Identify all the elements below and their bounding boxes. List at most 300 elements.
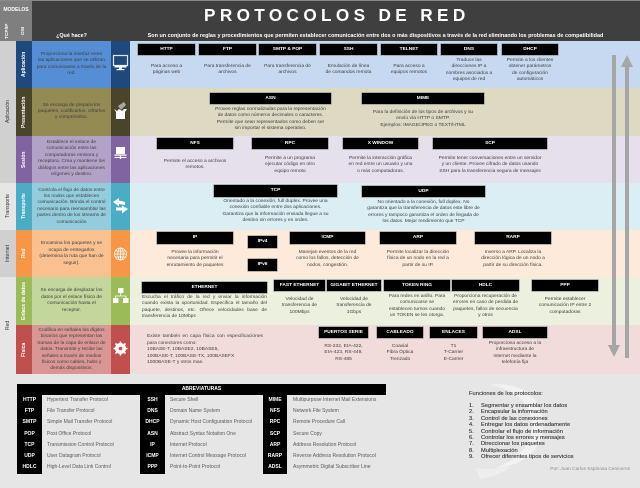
protocol: Cableado: CABLEADO — [386, 330, 414, 335]
panel: capa de aplicacion: las aplicaciones que se utilizan — [38, 58, 105, 63]
panel: capa de presentacion: y comprimirlos. — [55, 115, 88, 120]
abbreviation column 1: FTP — [25, 408, 34, 414]
abbreviation column 2: DNS — [147, 408, 158, 414]
panel: capa de sesion: Establece el enlace de — [47, 140, 96, 145]
abbreviation column 2: SSH — [147, 397, 158, 403]
list items: Controlar los errores y mensajes — [481, 435, 565, 441]
text: conectores fisicos: 1000BASE-T y otros mas. — [147, 360, 203, 365]
protocol: X Window: en red entre un usuario y una — [349, 162, 412, 167]
protocol: Token Ring: comunicarse se — [400, 300, 434, 305]
protocol: IP: IP — [193, 235, 197, 240]
protocol: UDP — [361, 185, 486, 224]
abbreviation column 2: IP — [150, 442, 155, 448]
protocol: X Window: o más computadoras. — [357, 168, 404, 174]
arrow: up — [621, 55, 633, 358]
protocol: SSH: SSH — [344, 47, 353, 52]
TCP/IP column: Internet — [0, 230, 16, 277]
protocol: Fast Ethernet: Velocidad de — [285, 297, 314, 302]
protocol: DHCP: DHCP — [523, 47, 537, 52]
meanings column 1: Transmission Control Protocol — [47, 442, 114, 448]
protocol: SMTP y POP: SMTP & POP — [273, 47, 302, 52]
protocol: Puertos serie: RS-232, EIA-422, — [324, 344, 363, 349]
meanings column 3 — [293, 395, 385, 474]
protocol: PPP: computadoras — [550, 310, 580, 315]
label: TCP/IP: TCP/IP — [5, 23, 10, 39]
abbreviation column 2 — [140, 395, 165, 474]
protocol: Gigabit Ethernet: Velocidad de — [340, 297, 368, 302]
protocol: IP: necesaria para permitir el — [167, 256, 223, 261]
list numbers: 9. — [469, 454, 474, 460]
protocol: DNS — [440, 43, 498, 82]
meanings column 3: Asymmetric Digital Subscriber Line — [293, 464, 371, 470]
text: conectores fisicos: Existe también en capa física con especificaciones — [147, 334, 263, 339]
protocol: SMTP y POP: Para transferencia de — [264, 64, 311, 69]
abbreviation column 1: UDP — [24, 453, 35, 459]
panel: capa fisica: binarios que representan las — [41, 334, 102, 339]
protocol: DHCP: de configuración — [512, 71, 548, 76]
protocol: DNS: DNS — [464, 47, 474, 52]
panel: capa de sesion: computadoras emisora y — [45, 153, 98, 158]
protocol: MIME: Para la definición de los tipos de archivos y su — [373, 110, 473, 115]
list numbers: 1. — [469, 403, 474, 409]
protocol: HDLC: errores en caso de perdida de — [453, 300, 518, 305]
text: conectores fisicos: 10BASE-T, 10BASE2, 10BASE5, — [147, 347, 219, 352]
protocol: MIME: MIME — [417, 96, 429, 101]
list numbers: 2. — [469, 409, 474, 415]
protocol: Enlaces — [429, 326, 478, 362]
panel: capa de aplicacion: para comunicarse a través de la — [37, 65, 106, 70]
subtitle: Son un conjunto de reglas y procedimientos que permiten establecer comunicación entre dos o más dispositivos a través de la red eliminando los problemas de compatibilidad — [148, 33, 603, 39]
list items: Controlar el flujo de información — [481, 429, 563, 435]
meanings column 2 — [170, 395, 262, 474]
abbreviation column 2: ASN — [147, 431, 158, 437]
protocol: SCP — [432, 137, 548, 174]
TCP/IP column: Aplicacion — [0, 41, 16, 183]
panel: capa de transporte — [16, 183, 640, 230]
tag: IPv6 — [248, 259, 277, 271]
protocol: Enlaces: T-Carrier — [444, 350, 463, 355]
protocol: ASN: sin importar el sistema operativo. — [235, 126, 306, 131]
protocol: DNS: direcciones IP a — [452, 64, 486, 69]
protocol: RARP: partir de su dirección física. — [483, 262, 543, 268]
icon: monitor — [111, 41, 130, 88]
table heading — [17, 384, 386, 395]
protocol: RPC: RPC — [285, 141, 295, 146]
panel: capa de enlace de datos: Enlace de datos — [21, 282, 27, 320]
meanings column 2: Abstract Syntax Notation One — [170, 431, 236, 437]
protocol: ASN: Provee reglas normalizadas para la representación — [215, 107, 326, 112]
meanings column 1: Simple Mail Transfer Protocol — [47, 419, 112, 425]
protocol: TELNET — [380, 43, 438, 75]
protocol: HDLC — [451, 279, 520, 318]
list items: Segmentar y ensamblar los datos — [481, 403, 567, 409]
protocol: ASN: de datos como números decimales o caracteres. — [218, 113, 323, 118]
panel: capa fisica: Física — [21, 342, 27, 357]
abbreviation column 1: HDLC — [23, 464, 36, 470]
panel: capa de enlace de datos: datos por el enlace físico de — [41, 295, 102, 300]
panel: capa de transporte: necesario para reensamblar las — [37, 207, 106, 212]
protocol: Fast Ethernet — [273, 279, 326, 315]
protocol: UDP: garantiza que la transferencia de datos este libre de — [367, 206, 480, 211]
protocol: ASN: ASN — [265, 96, 276, 101]
protocol: RPC: ejecutar código en otro — [265, 162, 315, 167]
protocol: ICMP — [289, 231, 366, 268]
protocol: Gigabit Ethernet: GIGABIT ETHERNET — [330, 283, 378, 288]
abbreviation column 2: PPP — [147, 464, 158, 470]
protocol: FTP: FTP — [223, 47, 232, 52]
protocol: DHCP: automáticos — [517, 77, 543, 82]
panel: capa fisica: físicos como cables, hubs y — [42, 360, 101, 365]
protocol: ADSL — [482, 326, 548, 365]
meanings column 1: High-Level Data Link Control — [47, 464, 111, 470]
protocol: IP — [156, 231, 234, 268]
icon: terminal — [111, 136, 130, 183]
list items: Ofrecer diferentes tipos de servicios — [481, 454, 574, 460]
protocol: X Window: Permite la interacción gráfica — [349, 156, 412, 160]
protocol: PPP: PPP — [560, 283, 570, 288]
abbreviation column 3: ARP — [270, 442, 280, 448]
protocol: Gigabit Ethernet: 1Gbps — [347, 310, 361, 315]
meanings column 3: Multipurpose Internet Mail Extensions — [293, 397, 376, 403]
panel: capa de enlace de datos: receptor. — [62, 308, 81, 313]
abbreviation column 1: SMTP — [23, 419, 36, 425]
functions heading: Funciones de los protocolos: — [469, 391, 543, 397]
protocol: ARP: ARP — [413, 235, 423, 240]
protocol: HTTP: páginas web — [153, 70, 180, 75]
table heading: ABREVIATURAS — [182, 386, 221, 392]
protocol: UDP: errores y tampoco garantiza el orden de llegada de — [368, 213, 479, 218]
protocol: HDLC: paquetes, fallos de secuencia — [453, 307, 518, 312]
protocol: Token Ring: un TOKEN se les otorga. — [390, 313, 444, 318]
protocol: SSH: Emulación de línea — [328, 64, 369, 69]
protocol: HDLC: HDLC — [479, 283, 492, 288]
column heading: que hace: ¿Qué hace? — [56, 33, 87, 39]
protocol: ADSL: Proporciona acceso a la — [489, 341, 541, 346]
TCP/IP column: Red: Red — [5, 321, 11, 330]
protocol: Ethernet: Escucha el tráfico de la red y enviar la información cuando exista la oportunidad. Especifica el tamaño del paquete, destinos, etc. Ofrece velocidades base de transferencia de 10Mbps — [142, 295, 267, 319]
panel: capa de aplicacion: red. — [67, 71, 76, 76]
panel: capa de transporte: comunicación — [57, 220, 86, 225]
protocol: RPC — [251, 137, 329, 174]
protocol: TCP: Garantiza que la información enviada llegue a su — [222, 212, 329, 217]
protocol: SCP: SSH para la transferencia segura de mensajes — [439, 168, 541, 174]
abbreviation column 3: NFS — [270, 408, 280, 414]
protocol: DNS: Traduce las — [456, 58, 482, 63]
protocol: ARP: física de un nodo en la red a — [387, 256, 449, 261]
panel: capa de aplicacion — [16, 41, 640, 88]
TCP/IP column: Aplicacion: Aplicación — [5, 101, 11, 123]
header band — [0, 0, 640, 41]
abbreviation column 1: TCP — [24, 442, 34, 448]
panel: capa de sesion: Sesión — [21, 151, 27, 168]
protocol: ASN — [209, 92, 332, 131]
protocol: ADSL: ADSL — [508, 330, 522, 335]
abbreviation column 1: HTTP — [23, 397, 36, 403]
panel: capa fisica: demás dispositivos. — [50, 366, 93, 371]
protocol: SMTP y POP: archivos — [278, 70, 297, 75]
meanings column 3: Reverse Address Resolution Protocol — [293, 453, 376, 459]
list items: Multiplexación — [481, 448, 518, 454]
protocol: PPP: Permite establecer — [545, 297, 585, 302]
panel: capa de presentacion — [16, 88, 640, 136]
protocol: ADSL: internet mediante la — [494, 354, 536, 359]
protocol: ARP — [379, 231, 457, 268]
panel: capa de presentacion: Presentación — [21, 96, 27, 128]
protocol: ICMP: Manejan eventos de la red — [299, 250, 356, 254]
protocol: HDLC: y otros — [478, 313, 493, 318]
protocol: RARP: dirección lógica de un nodo a — [481, 256, 545, 261]
list numbers: 5. — [469, 429, 474, 435]
meanings column 2: Internet Protocol — [170, 442, 207, 448]
protocol: FTP: archivos — [218, 70, 237, 75]
panel: capa de enlace de datos — [16, 277, 640, 325]
protocol: HDLC: Proporciona recuperación de — [454, 294, 517, 299]
list numbers: 8. — [469, 448, 474, 454]
meanings column 2: Internet Control Message Protocol — [170, 453, 246, 459]
protocol: SCP: SCP — [485, 141, 495, 146]
meanings column 2: Domain Name System — [170, 408, 220, 414]
meanings column 3: Remote Procedure Call — [293, 419, 345, 425]
meanings column 1: File Transfer Protocol — [47, 408, 95, 414]
protocol: SSH — [319, 43, 378, 75]
protocol: TCP: TCP — [271, 188, 280, 193]
meanings column 1: User Datagram Protocol — [47, 453, 101, 459]
panel: capa de sesion: comunicación entre las — [46, 146, 97, 151]
protocol: FTP — [198, 43, 257, 75]
protocol: Puertos serie: EIA-423, RS-449, — [324, 350, 363, 355]
tag: IPv4: IPv4 — [258, 239, 267, 244]
panel: capa de enlace de datos: comunicación hasta el — [47, 301, 96, 306]
protocol: UDP: No orientado a la conexión, full duplex. No — [378, 200, 469, 205]
panel: capa de sesion: orígenes y destino. — [51, 172, 92, 177]
meanings column 3: Address Resolution Protocol — [293, 442, 356, 448]
tag: IPv4 — [248, 236, 277, 248]
panel: capa de aplicacion: Aplicación — [21, 52, 27, 77]
abbreviation column 3: ADSL — [268, 464, 282, 470]
abbreviation column 2: DHCP — [145, 419, 160, 425]
protocol: ICMP: nodos, congestión. — [307, 262, 348, 268]
protocol: Token Ring: establecen turnos cuando — [389, 307, 445, 312]
panel: capa de presentacion: paquetes, codificarlos, cifrarlos — [38, 109, 105, 114]
abbreviation column 1 — [17, 395, 42, 474]
icon: cup with papers — [111, 88, 130, 136]
protocol: X Window: X WINDOW — [368, 141, 393, 146]
text: conectores fisicos: 100BASE-T, 100BASE-TX, 100BASEFX — [147, 354, 234, 358]
protocol: ASN: Permite que sean representados como deben ser — [217, 120, 324, 125]
abbreviation column 3: SCP — [270, 431, 280, 437]
protocol: DHCP: obtener parámetros — [509, 64, 551, 69]
TCP/IP column: Red — [0, 277, 16, 374]
panel: capa de aplicacion: Proporciona la interfaz entre — [41, 52, 102, 57]
protocol: Token Ring: TOKEN RING — [402, 283, 432, 288]
protocol: Token Ring — [383, 279, 451, 318]
protocol: PPP — [531, 279, 599, 315]
protocol: UDP: los datos. Mejor rendimiento que TCP — [382, 219, 464, 224]
abbreviation column 3: RPC — [270, 419, 280, 425]
table: abreviaturas — [17, 384, 386, 474]
panel: capa de red: Encamina los paquetes y se — [41, 241, 102, 246]
protocol: ICMP: ICMP — [322, 235, 334, 240]
protocol: SCP: Permite tener conversaciones entre un servidor — [439, 156, 541, 160]
meanings column 1 — [47, 395, 139, 474]
speech bubble watermark — [470, 378, 550, 488]
protocol: Cableado — [376, 326, 424, 362]
panel: capa fisica: tramas de la capa de enlace de — [37, 341, 106, 346]
panel: capa de transporte: Transporte — [21, 194, 27, 219]
protocol: HTTP: HTTP — [160, 47, 173, 52]
abbreviation column 3: MIME — [268, 397, 282, 403]
panel: capa de red — [16, 230, 640, 277]
panel: capa de red: ocupa de entregarlos — [49, 248, 94, 253]
protocol: RARP: RARP — [506, 235, 520, 240]
protocol: Enlaces: T1 — [451, 344, 456, 349]
protocol: SCP: y un cliente. Provee cifrado de datos usando — [442, 162, 538, 167]
panel: capa fisica: señales a través de medios — [42, 354, 101, 359]
author credit: Por: Juan Carlos Espinosa Ceniceros — [550, 467, 630, 472]
protocol: ADSL: infraestructura de — [496, 347, 534, 352]
protocol: Enlaces: ENLACES — [442, 330, 465, 335]
text: conectores fisicos: para conectores como: — [147, 340, 197, 346]
meanings column 3: Network File System — [293, 408, 339, 414]
protocol: Cableado: Trenzado — [390, 357, 410, 362]
title: PROTOCOLOS DE RED — [204, 5, 470, 25]
protocol: Enlaces: E-Carrier — [444, 357, 463, 362]
protocol: PPP: comunicación IP entre 2 — [539, 303, 591, 308]
protocol: IP: enrutamiento de paquetes — [167, 262, 223, 268]
TCP/IP column: Transporte — [0, 183, 16, 230]
icon: gear — [111, 325, 130, 374]
protocol: TCP: Orientado a la conexión, full duplex. Provee una — [223, 199, 328, 204]
protocol: FTP: Para transferencia de — [204, 64, 251, 69]
protocol: Fast Ethernet: FAST ETHERNET — [280, 283, 319, 288]
meanings column 2: Dynamic Host Configuration Protocol — [170, 419, 252, 425]
protocol: ADSL: telefonía fija — [502, 360, 528, 365]
icon: network tree — [111, 277, 130, 325]
meanings column 1: Hypertext Transfer Protocol — [47, 397, 108, 403]
protocol: TCP: conexión confiable entre dos aplicaciones. — [230, 205, 321, 210]
protocol: DNS: nombres asociados a — [446, 71, 492, 76]
protocol: SSH: de comandos remota — [326, 70, 371, 75]
TCP/IP column: Internet: Internet — [5, 245, 11, 262]
protocol: ARP: Permite localizar la dirección — [387, 250, 449, 254]
icon: two-way arrows — [111, 183, 130, 230]
list numbers: 7. — [469, 441, 474, 447]
arrow: down — [608, 55, 620, 357]
list items: Entregar los datos ordenadamente — [481, 422, 570, 428]
panel: capa fisica — [16, 325, 640, 374]
protocol: Puertos serie: PUERTOS SERIE — [324, 330, 363, 335]
list items: Direccionar los paquetes — [481, 441, 545, 447]
panel: capa fisica: Codifica en señales los dígitos — [38, 328, 105, 333]
protocol: Puertos serie: RS-485 — [335, 357, 352, 362]
meanings column 3: Secure Copy — [293, 431, 322, 437]
protocol: Cableado: Fibra Óptica — [387, 350, 413, 355]
protocol: Gigabit Ethernet: transferencia de — [336, 303, 372, 308]
protocol: NFS: remotos. — [185, 165, 205, 170]
panel: capa de transporte: los nodos que establecen — [44, 194, 99, 199]
list numbers: 6. — [469, 435, 474, 441]
abbreviation column 1: POP — [24, 431, 35, 437]
protocol: NFS: NFS — [190, 141, 200, 146]
meanings column 2: Secure Shell — [170, 397, 198, 403]
panel: capa de sesion — [16, 136, 548, 183]
text: conectores fisicos — [147, 334, 263, 365]
list items: Control de las conexiones — [481, 416, 548, 422]
protocol: Token Ring: Para redes en anillo. Para — [389, 294, 445, 299]
panel: capa de transporte: Controla el flujo de datos entre — [38, 188, 105, 192]
protocol: SMTP y POP — [258, 43, 317, 75]
icon: globe — [111, 230, 130, 277]
protocol: Puertos serie — [318, 326, 369, 362]
panel: capa de sesion: diálogos entre las aplicaciones — [38, 166, 105, 171]
protocol: DNS: equipos de red — [453, 77, 485, 82]
functions list — [469, 390, 599, 468]
protocol: Ethernet — [141, 281, 268, 319]
panel: capa de red: (determina la ruta que han de — [39, 254, 104, 259]
protocol: TELNET: equipos remotos — [391, 70, 427, 75]
protocol: TCP: destino sin errores y en orden. — [242, 218, 309, 223]
protocol: X Window — [342, 137, 419, 174]
protocol: NFS: Permite el acceso a archivos — [164, 159, 226, 164]
list numbers: 3. — [469, 416, 474, 422]
meanings column 2: Point-to-Point Protocol — [170, 464, 220, 470]
protocol: DHCP: Permite a los clientes — [507, 58, 553, 63]
protocol: MIME: Ejemplos: IMAGE/JPEG o TEXT/HTML — [380, 123, 466, 128]
protocol: HTTP — [137, 43, 196, 75]
panel: capa de red: seguir). — [63, 261, 80, 266]
protocol: ARP: partir de su IP. — [402, 262, 434, 268]
protocol: DHCP — [501, 43, 559, 82]
protocol: Gigabit Ethernet — [326, 279, 382, 315]
list items — [481, 403, 574, 461]
panel: capa de red: Red — [21, 249, 27, 258]
protocol: ICMP: como los fallos, detección de — [296, 256, 359, 261]
panel: capa de presentacion: Se encarga de prepara los — [43, 102, 100, 108]
protocol: Fast Ethernet: transferencia de — [282, 303, 317, 308]
panel: capa fisica: datos. Transmite y recibe las — [40, 347, 103, 352]
protocol: IP: Provee la información — [171, 250, 219, 254]
abbreviation column 3: RARP — [268, 453, 282, 459]
panel: capa de transporte: comunicación. Brinda el control — [38, 200, 105, 205]
TCP/IP column: Transporte: Transporte — [5, 194, 11, 218]
protocol: HTTP: Para acceso a — [151, 64, 182, 69]
meanings column 1: Post Office Protocol — [47, 431, 91, 437]
protocol: RPC: Permite a un programa — [265, 156, 315, 160]
protocol: MIME — [361, 92, 485, 128]
protocol: TCP — [213, 184, 338, 223]
abbreviation column 2: ICMP — [146, 453, 159, 459]
panel: capa de enlace de datos: Se encarga de desplazar los — [40, 288, 102, 293]
protocol: RARP — [474, 231, 552, 268]
protocol: Fast Ethernet: 100Mbps — [289, 310, 310, 315]
label: OSI: OSI — [21, 27, 26, 35]
protocol: UDP: UDP — [418, 189, 429, 194]
protocol: TELNET: TELNET — [400, 47, 418, 52]
protocol: RPC: equipo remoto — [274, 168, 306, 174]
label: modelos: MODELOS — [3, 7, 29, 13]
models column heading — [0, 1, 32, 41]
protocol: TELNET: Para acceso a — [393, 64, 425, 69]
list items: Encapsular la información — [481, 409, 548, 415]
list numbers: 4. — [469, 422, 474, 428]
panel: capa de sesion: receptora. Crea y mantiene los — [38, 159, 105, 164]
abbreviation column 3 — [263, 395, 287, 474]
protocol: Ethernet: ETHERNET — [192, 285, 217, 290]
panel: capa de transporte: partes dentro de los streams de — [37, 213, 106, 218]
list numbers — [469, 403, 474, 461]
protocol: NFS — [156, 137, 234, 170]
tag: IPv6: IPv6 — [258, 262, 267, 267]
